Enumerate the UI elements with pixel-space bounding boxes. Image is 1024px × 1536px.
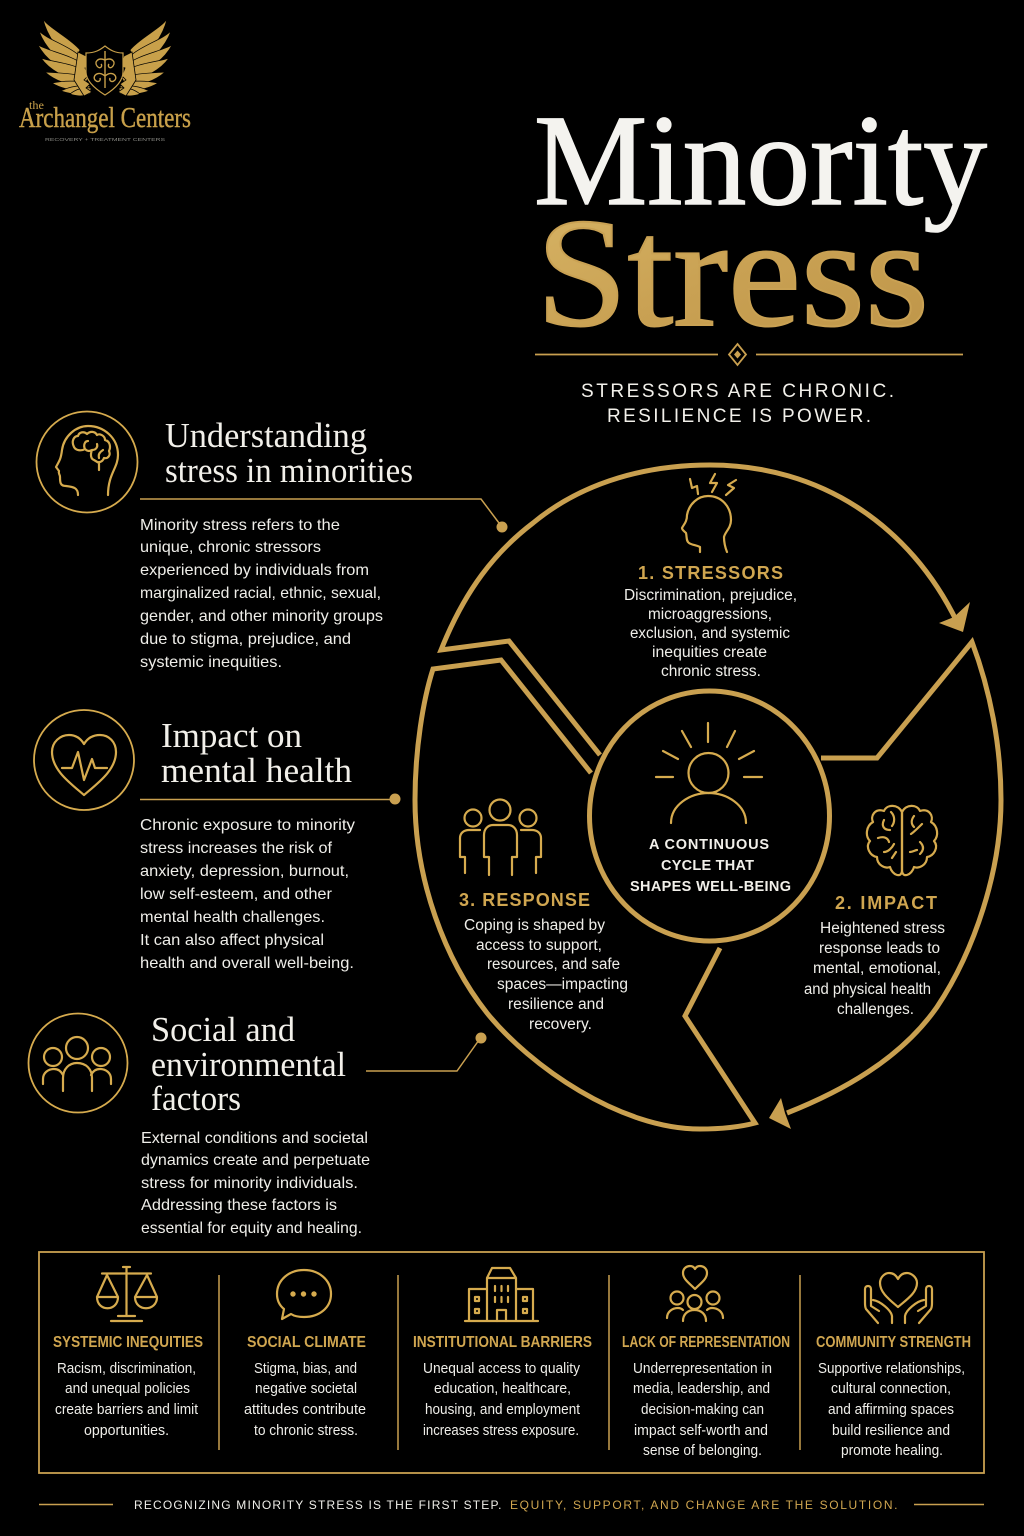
column: social climate: negative societal [255, 1380, 357, 1397]
logo: The Archangel Centers: RECOVERY + TREATMENT CENTERS [45, 137, 165, 142]
icon: hands holding heart [865, 1273, 932, 1323]
footer message: EQUITY, SUPPORT, AND CHANGE ARE THE SOLUTION. [510, 1498, 899, 1512]
column: systemic inequities: create barriers and limit [55, 1401, 199, 1418]
heading [151, 1010, 346, 1118]
heading: Understanding [165, 416, 367, 455]
text block [140, 817, 355, 972]
icon: head with lightning bolts [682, 474, 736, 552]
text block [141, 1130, 370, 1237]
step 1: stressors: microaggressions, [648, 606, 772, 623]
step 1: stressors: chronic stress. [661, 663, 761, 680]
connector to cycle [366, 1032, 486, 1071]
column: systemic inequities: Racism, discrimination, [57, 1360, 196, 1377]
step 3: response: recovery. [529, 1016, 592, 1033]
arrow: segment 2 ring [769, 642, 1001, 1129]
text block: stress for minority individuals. [141, 1175, 358, 1192]
logo: The Archangel Centers: the [29, 98, 44, 112]
text block: essential for equity and healing. [141, 1220, 362, 1237]
column: social climate: SOCIAL CLIMATE [247, 1334, 366, 1351]
column: lack of representation: impact self-worth and [634, 1422, 768, 1439]
step 1: stressors: exclusion, and systemic [630, 625, 790, 642]
step 3: response: Coping is shaped by [464, 917, 605, 934]
text block: dynamics create and perpetuate [141, 1152, 370, 1169]
arrow: segment 1 ring [441, 465, 970, 755]
step 3: response: spaces—impacting [497, 976, 628, 993]
heading [165, 416, 413, 490]
step 2: impact: and physical health [804, 981, 931, 998]
step 3: response: 3. RESPONSE [459, 890, 592, 910]
text block: Chronic exposure to minority [140, 817, 355, 834]
column: community strength: cultural connection, [831, 1380, 951, 1397]
step 1: stressors: Discrimination, prejudice, [624, 587, 797, 604]
column: institutional barriers: increases stress exposure. [423, 1422, 579, 1439]
text block: experienced by individuals from [140, 562, 369, 579]
center text: CYCLE THAT [661, 858, 755, 874]
text block: gender, and other minority groups [140, 608, 383, 625]
step 3: response: access to support, [476, 937, 602, 954]
chart: continuous cycle diagram [415, 465, 1001, 1129]
step 2: impact: 2. IMPACT [835, 893, 939, 913]
column: community strength: promote healing. [841, 1442, 943, 1459]
text block: stress increases the risk of [140, 840, 333, 857]
step 2: impact: challenges. [837, 1001, 914, 1018]
tagline: STRESSORS ARE CHRONIC. [581, 381, 897, 402]
icon: heart over three people [667, 1266, 723, 1321]
center text: SHAPES WELL-BEING [630, 879, 792, 895]
text block: anxiety, depression, burnout, [140, 863, 349, 880]
heading: Impact on [161, 716, 302, 755]
text block: unique, chronic stressors [140, 539, 321, 556]
heading: factors [151, 1079, 241, 1118]
heading: mental health [161, 751, 352, 790]
heading [161, 716, 352, 790]
step 1: stressors: inequities create [652, 644, 767, 661]
heading: stress in minorities [165, 451, 413, 490]
step 3: response: resilience and [508, 996, 604, 1013]
step 2: impact: Heightened stress [820, 920, 945, 937]
logo: The Archangel Centers: Archangel Centers [19, 103, 191, 134]
column: institutional barriers [413, 1268, 592, 1439]
column: lack of representation: decision-making can [641, 1401, 764, 1418]
column: systemic inequities: and unequal policies [65, 1380, 190, 1397]
center text: A CONTINUOUS [649, 837, 770, 853]
icon: heart with pulse [34, 710, 134, 810]
icon: three people [460, 800, 541, 875]
column: community strength: build resilience and [832, 1422, 950, 1439]
column: social climate: Stigma, bias, and [254, 1360, 357, 1377]
text block: due to stigma, prejudice, and [140, 631, 351, 648]
column: systemic inequities: opportunities. [84, 1422, 169, 1439]
column: community strength: Supportive relationships, [818, 1360, 965, 1377]
column: systemic inequities [53, 1267, 203, 1439]
column: systemic inequities: SYSTEMIC INEQUITIES [53, 1334, 203, 1351]
tagline: RESILIENCE IS POWER. [607, 406, 874, 427]
column: lack of representation: LACK OF REPRESENTATION [622, 1334, 790, 1351]
column: lack of representation: sense of belonging. [643, 1442, 762, 1459]
heading: environmental [151, 1045, 346, 1084]
step 2: impact: response leads to [819, 940, 940, 957]
column: social climate: attitudes contribute [244, 1401, 366, 1418]
center circle [590, 691, 830, 941]
title [534, 89, 987, 359]
step 3: response [459, 800, 628, 1033]
column: institutional barriers: Unequal access to quality [423, 1360, 580, 1377]
column: institutional barriers: housing, and employment [425, 1401, 581, 1418]
icon: person with radiating rays [656, 723, 762, 823]
column: lack of representation: Underrepresentation in [633, 1360, 772, 1377]
text block: Addressing these factors is [141, 1197, 337, 1214]
icon: building [465, 1268, 538, 1321]
text block: mental health challenges. [140, 909, 325, 926]
column: lack of representation: media, leadership, and [633, 1380, 770, 1397]
column: social climate [244, 1270, 366, 1439]
column: institutional barriers: INSTITUTIONAL BARRIERS [413, 1334, 592, 1351]
title: Stress [536, 186, 929, 359]
text block: It can also affect physical [140, 932, 324, 949]
icon: scales [97, 1267, 157, 1321]
panel: impact on mental health [34, 710, 400, 972]
icon: group of people [28, 1014, 128, 1112]
center text [630, 837, 792, 895]
text block: health and overall well-being. [140, 955, 354, 972]
text block: marginalized racial, ethnic, sexual, [140, 585, 381, 602]
panel: contributing factors strip [39, 1252, 984, 1473]
step 2: impact [804, 806, 945, 1018]
heading: Social and [151, 1010, 295, 1049]
logo: The Archangel Centers [19, 19, 191, 142]
icon: speech bubble [277, 1270, 331, 1319]
step 1: stressors [624, 474, 797, 680]
icon: shield [86, 46, 123, 95]
column: community strength: and affirming spaces [828, 1401, 954, 1418]
step 2: impact: mental, emotional, [813, 960, 941, 977]
text block [140, 517, 383, 671]
icon: left wing [38, 19, 92, 96]
title: Minority [534, 89, 987, 233]
text block: External conditions and societal [141, 1130, 368, 1147]
column: community strength: COMMUNITY STRENGTH [816, 1334, 971, 1351]
footer message: RECOGNIZING MINORITY STRESS IS THE FIRST STEP. [134, 1498, 503, 1512]
title divider with diamond [535, 344, 963, 365]
connector to cycle [140, 794, 400, 804]
icon: right wing [118, 19, 172, 96]
text block: systemic inequities. [140, 654, 282, 671]
column: community strength [816, 1273, 971, 1459]
icon: head with brain [36, 412, 138, 512]
footer message [39, 1498, 984, 1512]
column: social climate: to chronic stress. [254, 1422, 358, 1439]
tagline [581, 381, 897, 427]
text block: low self-esteem, and other [140, 886, 333, 903]
connector to cycle [140, 499, 508, 532]
arrow: segment 3 ring [415, 660, 755, 1129]
step 3: response: resources, and safe [487, 956, 620, 973]
column: institutional barriers: education, healthcare, [434, 1380, 571, 1397]
panel: understanding stress in minorities [36, 412, 508, 671]
column: lack of representation [622, 1266, 790, 1459]
icon: brain [867, 806, 937, 875]
step 1: stressors: 1. STRESSORS [638, 563, 785, 583]
text block: Minority stress refers to the [140, 517, 340, 534]
panel: social and environmental factors [28, 1010, 486, 1237]
